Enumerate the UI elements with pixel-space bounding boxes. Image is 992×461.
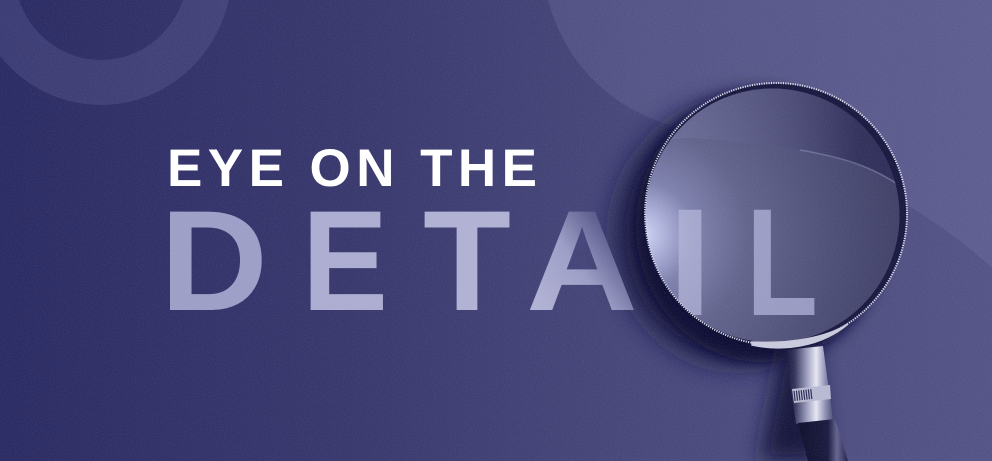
lens contents xyxy=(670,88,896,315)
bottom metal lip xyxy=(752,324,848,348)
lens cast shadow xyxy=(616,90,888,461)
handle grip xyxy=(798,419,848,461)
heading: detail: E xyxy=(302,182,388,341)
magnified letter L: L xyxy=(746,177,818,348)
handle knurl xyxy=(792,385,831,403)
magnified letter I: I xyxy=(668,177,712,348)
lens upper reflection xyxy=(670,88,894,181)
rim backing xyxy=(646,84,906,344)
handle collar xyxy=(785,346,833,424)
heading: detail: A xyxy=(526,182,638,341)
decorative ring top left xyxy=(0,0,232,105)
heading: detail xyxy=(170,212,634,310)
reflection gleam xyxy=(800,150,900,186)
heading: detail: D xyxy=(160,182,268,341)
magnifying glass xyxy=(640,80,910,461)
lens glass xyxy=(646,88,900,342)
heading: eye on the: EYE ON THE xyxy=(167,139,537,198)
heading: detail: T xyxy=(423,182,511,341)
decorative curved light area top right xyxy=(548,0,992,268)
serrated edge xyxy=(645,83,907,345)
